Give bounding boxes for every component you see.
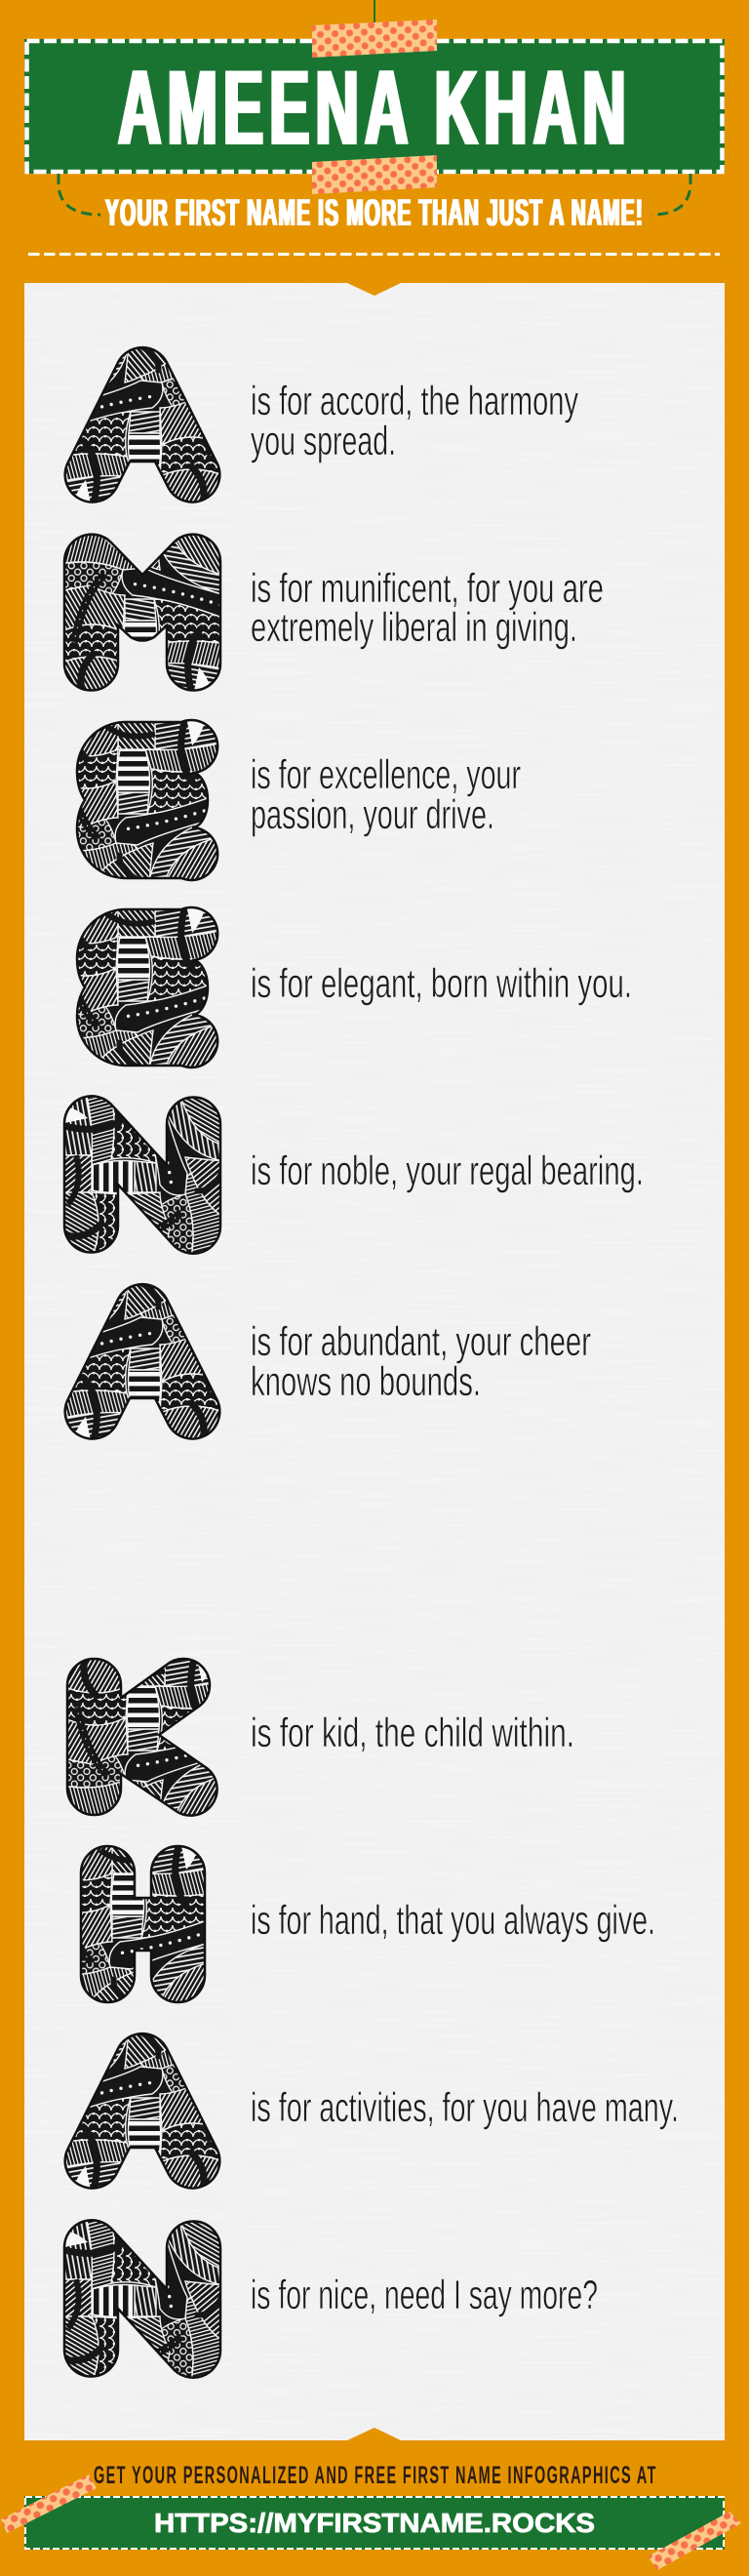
text: A accord: is for accord, the harmony	[251, 378, 578, 423]
connector: left	[59, 174, 100, 215]
title: AMEENA KHAN	[118, 47, 626, 167]
footer banner	[24, 2496, 725, 2550]
text: A abundant: is for abundant, your cheer	[251, 1318, 591, 1364]
text: A accord	[251, 378, 578, 463]
letter M	[62, 533, 222, 692]
footer URL: HTTPS://MYFIRSTNAME.ROCKS	[154, 2508, 595, 2538]
letter E	[76, 906, 218, 1069]
text: A accord: you spread.	[251, 418, 396, 463]
hanging string	[374, 0, 375, 25]
text: E excellence: passion, your drive.	[251, 791, 494, 837]
text: M munificent: is for munificent, for you are	[251, 565, 604, 611]
tape: bottom	[312, 155, 437, 194]
dashed divider	[28, 253, 720, 256]
tape: footer left	[1, 2475, 97, 2533]
panel: letters	[24, 283, 725, 2440]
text: A abundant	[251, 1318, 591, 1404]
text: E excellence	[251, 751, 521, 837]
tape: footer right	[648, 2512, 741, 2570]
text: M munificent: extremely liberal in giving.	[251, 604, 577, 650]
footer call to action: GET YOUR PERSONALIZED AND FREE FIRST NAME INFOGRAPHICS AT	[94, 2463, 656, 2489]
letter E	[76, 718, 218, 882]
tape: top	[312, 20, 437, 58]
letter A	[63, 2032, 221, 2190]
letter H	[80, 1844, 207, 2004]
text: A abundant: knows no bounds.	[251, 1358, 481, 1404]
letter A	[63, 345, 221, 503]
text: M munificent	[251, 565, 604, 650]
letter N	[62, 1095, 222, 1255]
letter A	[63, 1282, 221, 1440]
title banner	[24, 39, 725, 174]
text: E excellence: is for excellence, your	[251, 751, 521, 797]
text: K kid: is for kid, the child within.	[251, 1710, 574, 1755]
letter N	[62, 2219, 222, 2379]
letter K	[66, 1657, 218, 1817]
subtitle: YOUR FIRST NAME IS MORE THAN JUST A NAME!	[105, 191, 643, 234]
connector: right	[651, 174, 690, 215]
